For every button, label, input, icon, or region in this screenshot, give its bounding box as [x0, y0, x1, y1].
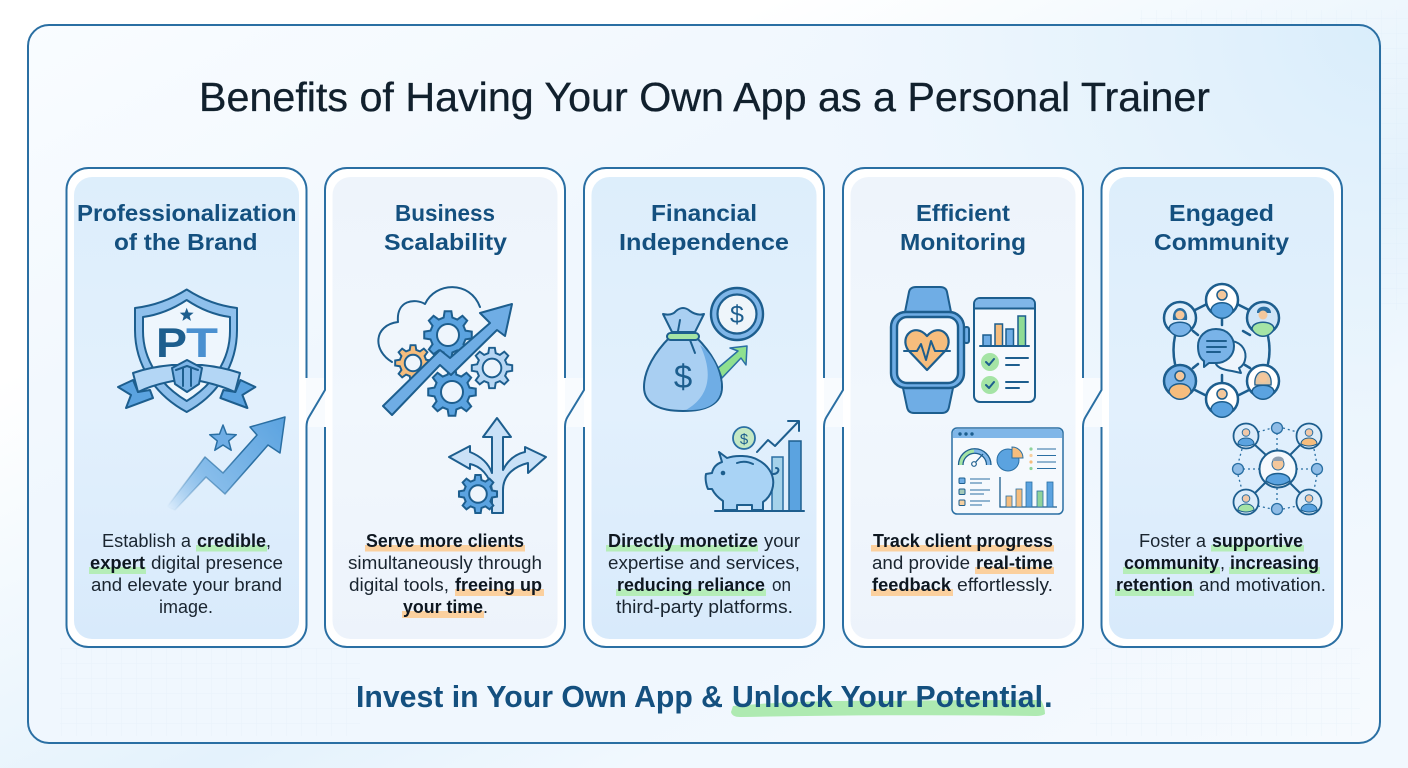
icon: community ring with chat bubbles	[1164, 284, 1279, 417]
text: card description: third-party platforms.	[616, 597, 793, 617]
heading: Efficient Monitoring	[900, 200, 1026, 255]
icon: smartwatch with heart rate	[891, 287, 969, 413]
heading: Engaged Community	[1154, 200, 1289, 255]
text: card description: digital tools,	[349, 575, 449, 595]
text: card description: Serve more clients	[366, 531, 524, 551]
text: card description: and motivation.	[1199, 575, 1326, 595]
text: card description: your	[764, 531, 800, 551]
icon: piggy bank and growth bars: $	[740, 431, 749, 448]
text: card description: community	[1124, 553, 1219, 573]
text: card description: and provide	[872, 553, 970, 573]
panel: Financial Independence	[584, 168, 824, 647]
heading: Professionalization of the Brand: Professionalization	[77, 200, 296, 226]
text: card description: reducing reliance	[617, 575, 765, 595]
text: card description: expertise and services,	[608, 553, 800, 573]
text: card description: Track client progress	[873, 531, 1053, 551]
text: card description	[89, 531, 283, 617]
text: card description: on	[772, 575, 791, 595]
icon: money bag, coin and arrow: $	[674, 358, 692, 395]
text: card description: freeing up	[455, 575, 542, 595]
text: card description: retention	[1116, 575, 1193, 595]
text: card description: Foster a	[1139, 531, 1207, 551]
text: card description	[348, 531, 544, 618]
panel: Efficient Monitoring	[843, 168, 1083, 647]
text: card description: real-time	[976, 553, 1053, 573]
heading: Financial Independence: Independence	[619, 229, 789, 255]
text: card description: Establish a	[102, 531, 192, 551]
icon: PT shield with ribbon: T	[186, 319, 218, 366]
heading: Efficient Monitoring: Monitoring	[900, 229, 1026, 255]
text: card description: ,	[266, 531, 271, 551]
icon: piggy bank and growth bars	[706, 421, 804, 511]
heading: Engaged Community: Engaged	[1169, 200, 1274, 226]
text: card description	[606, 531, 800, 617]
footer call to action: Invest in Your Own App &	[356, 679, 723, 714]
text: card description: credible	[197, 531, 266, 551]
footer call to action: .	[1044, 679, 1053, 714]
heading: Professionalization of the Brand	[77, 200, 296, 255]
text: card description: Directly monetize	[608, 531, 758, 551]
text: card description: effortlessly.	[957, 575, 1053, 595]
icon: analytics dashboard	[952, 428, 1063, 514]
heading: Professionalization of the Brand: of the Brand	[114, 229, 258, 255]
footer call to action	[356, 679, 1053, 717]
text: card description	[1115, 531, 1326, 596]
heading: Engaged Community: Community	[1154, 229, 1289, 255]
icon: branching arrows with gear	[449, 418, 546, 513]
panel: Professionalization of the Brand	[66, 168, 306, 647]
text: card description: your time	[403, 597, 483, 617]
footer call to action: Unlock Your Potential	[732, 679, 1043, 714]
icon: small user network	[1232, 422, 1322, 514]
icon: PT shield with ribbon: P	[156, 319, 187, 366]
text: card description: ,	[1220, 553, 1225, 573]
icon: phone report with checks	[974, 298, 1035, 402]
text: card description: digital presence	[151, 553, 283, 573]
heading: Financial Independence	[619, 200, 789, 255]
icon: money bag, coin and arrow: $	[730, 301, 744, 329]
heading: Financial Independence: Financial	[651, 200, 757, 226]
card outlines with slanted connectors	[66, 168, 1342, 647]
text: card description: supportive	[1212, 531, 1303, 551]
text: card description: image.	[159, 597, 213, 617]
icon: PT shield with ribbon	[118, 290, 255, 412]
heading: Efficient Monitoring: Efficient	[916, 200, 1010, 226]
panel: Engaged Community	[1102, 168, 1342, 647]
icon: rising arrow with star	[167, 417, 285, 510]
text: card description	[871, 531, 1054, 596]
panel: Business Scalability	[325, 168, 565, 647]
heading: Business Scalability: Business	[395, 200, 495, 226]
text: card description: simultaneously through	[348, 553, 542, 573]
icon: money bag, coin and arrow	[644, 288, 763, 411]
text: card description: feedback	[872, 575, 952, 595]
text: card description: increasing	[1230, 553, 1319, 573]
text: card description: expert	[90, 553, 145, 573]
title: Benefits of Having Your Own App as a Personal Trainer	[199, 74, 1210, 120]
heading: Business Scalability	[384, 200, 507, 255]
text: card description: .	[483, 597, 488, 617]
text: card description: and elevate your brand	[91, 575, 282, 595]
heading: Business Scalability: Scalability	[384, 229, 507, 255]
icon: cloud, gears and rising arrow	[378, 287, 512, 416]
